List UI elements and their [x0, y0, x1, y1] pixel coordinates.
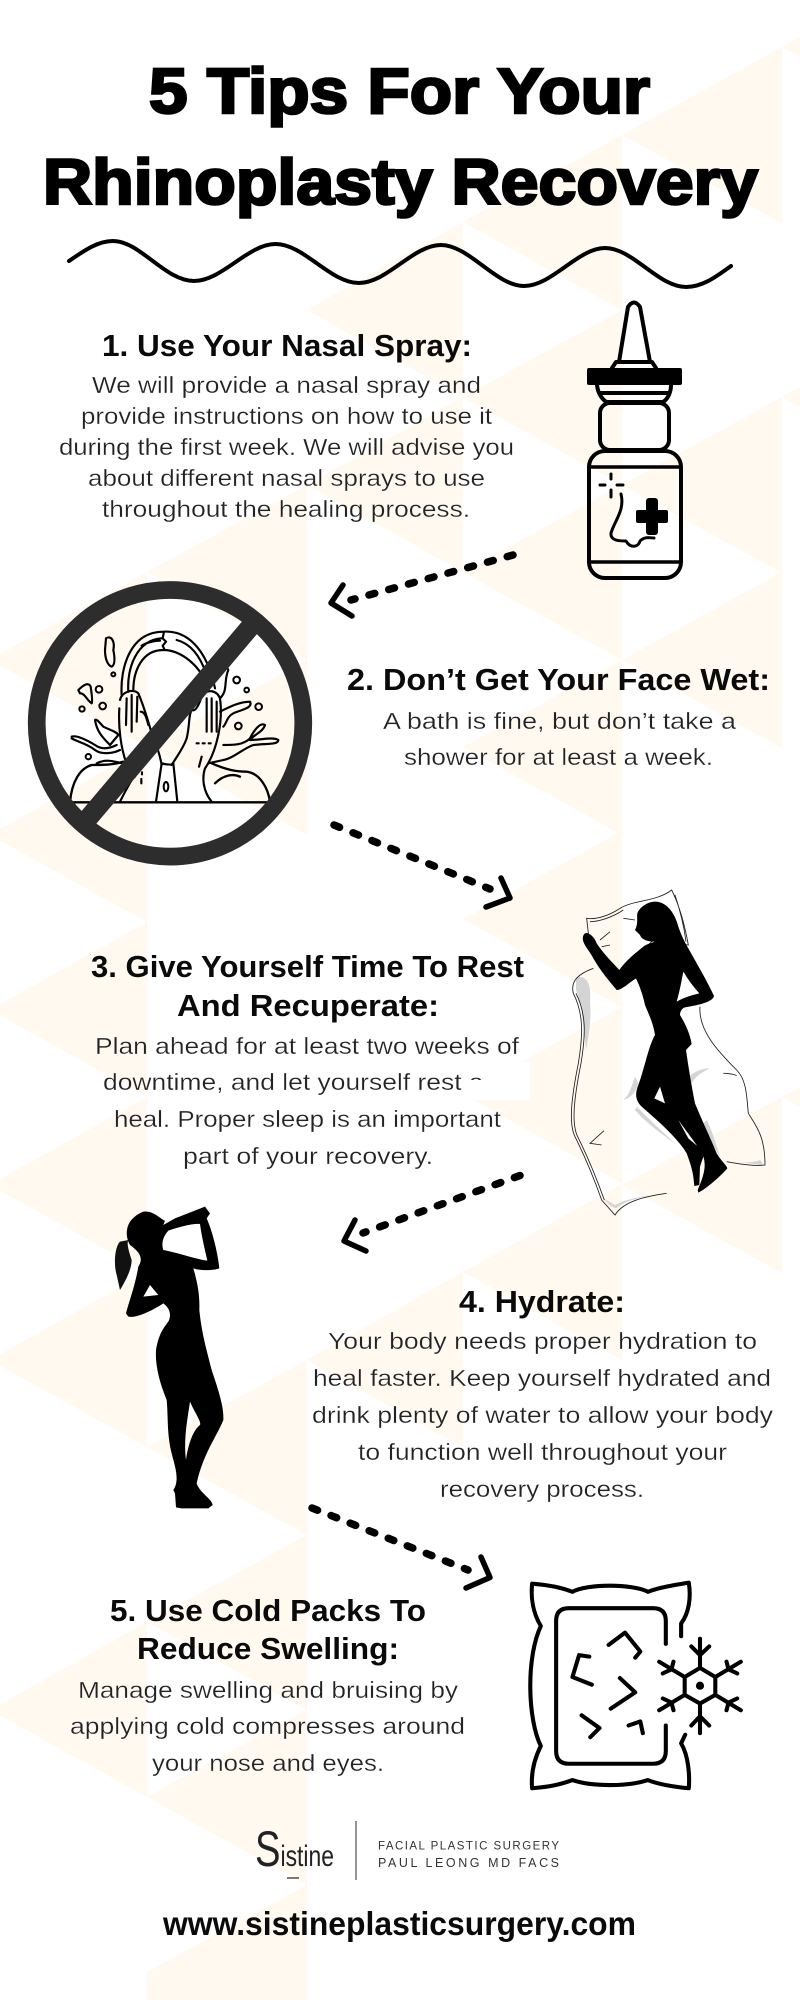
body: tip 3: downtime, and let yourself rest and	[103, 1069, 513, 1095]
body: tip 2	[383, 708, 737, 770]
panel: tip 5 text	[70, 1593, 465, 1776]
body: tip 1: during the first week. We will advise you	[59, 434, 514, 460]
heading: tip 3	[91, 949, 524, 1023]
body: tip 1: provide instructions on how to use it	[81, 403, 493, 429]
body: tip 2: A bath is fine, but don’t take a	[383, 708, 737, 734]
body: tip 2: shower for at least a week.	[404, 744, 713, 770]
body: tip 4: to function well throughout your	[358, 1439, 727, 1465]
body: tip 4: Your body needs proper hydration to	[328, 1328, 757, 1354]
title	[43, 55, 758, 218]
illustration: woman drinking from a bottle	[115, 1207, 223, 1508]
body: tip 1: throughout the healing process.	[102, 496, 470, 522]
body: tip 3: Plan ahead for at least two weeks of	[95, 1033, 520, 1059]
body: tip 3: heal. Proper sleep is an important	[114, 1106, 502, 1132]
body: tip 5: Manage swelling and bruising by	[78, 1677, 458, 1703]
sheet outline	[571, 968, 765, 1215]
website url: www.sistineplasticsurgery.com	[162, 1905, 636, 1942]
blanket shading	[576, 977, 764, 1208]
panel: tip 1 text	[59, 328, 514, 522]
logo tagline: FACIAL PLASTIC SURGERY	[378, 1840, 559, 1852]
icon: cold pack with snowflake	[530, 1583, 741, 1788]
heading: tip 3: 3. Give Yourself Time To Rest	[91, 949, 524, 984]
heading: tip 4: 4. Hydrate:	[459, 1284, 625, 1319]
pillow outline	[587, 890, 688, 973]
body: tip 4: recovery process.	[440, 1476, 644, 1502]
body: tip 1: We will provide a nasal spray and	[92, 372, 481, 398]
body: tip 3: part of your recovery.	[183, 1143, 433, 1169]
heading: tip 5: Reduce Swelling:	[137, 1631, 399, 1666]
heading: tip 1: 1. Use Your Nasal Spray:	[102, 328, 472, 363]
panel: tip 2 text	[347, 662, 770, 770]
body: tip 5: your nose and eyes.	[152, 1750, 384, 1776]
body: tip 3	[95, 1033, 520, 1169]
body: tip 4	[312, 1328, 773, 1502]
arrow: tip 4 to tip 5	[312, 1508, 490, 1588]
woman silhouette	[583, 902, 727, 1193]
icon: nasal spray bottle	[587, 302, 682, 578]
body: tip 1: about different nasal sprays to use	[88, 465, 485, 491]
body: tip 4: heal faster. Keep yourself hydrated and	[313, 1365, 771, 1391]
panel: tip 4 text	[312, 1284, 773, 1502]
panel: tip 3 text	[91, 949, 524, 1169]
body: tip 5: applying cold compresses around	[70, 1713, 465, 1739]
heading: tip 3: And Recuperate:	[177, 988, 439, 1023]
icon: no face washing symbol	[37, 590, 303, 857]
arrow: tip 1 to tip 2	[331, 555, 513, 616]
title: 5 Tips For Your	[149, 55, 650, 127]
body: tip 5	[70, 1677, 465, 1776]
arrow: tip 3 to tip 4	[344, 1176, 520, 1251]
logo: Sistine Facial Plastic Surgery	[255, 1821, 559, 1880]
logo wordmark: Sistine	[255, 1821, 334, 1877]
logo tagline	[378, 1840, 559, 1870]
heading: tip 5: 5. Use Cold Packs To	[110, 1593, 426, 1628]
body silhouette	[126, 1207, 223, 1508]
title: Rhinoplasty Recovery	[43, 146, 758, 218]
ponytail	[115, 1240, 132, 1290]
body: tip 1	[59, 372, 514, 522]
logo tagline: PAUL LEONG MD FACS	[378, 1856, 559, 1870]
heading: tip 2: 2. Don’t Get Your Face Wet:	[347, 662, 770, 697]
arrow: tip 2 to tip 3	[334, 825, 510, 907]
heading: tip 5	[110, 1593, 426, 1666]
wavy title underline	[69, 241, 731, 287]
illustration: woman sleeping on a sheet	[571, 890, 765, 1215]
body: tip 4: drink plenty of water to allow your body	[312, 1402, 773, 1428]
face and hands line art	[70, 632, 278, 802]
